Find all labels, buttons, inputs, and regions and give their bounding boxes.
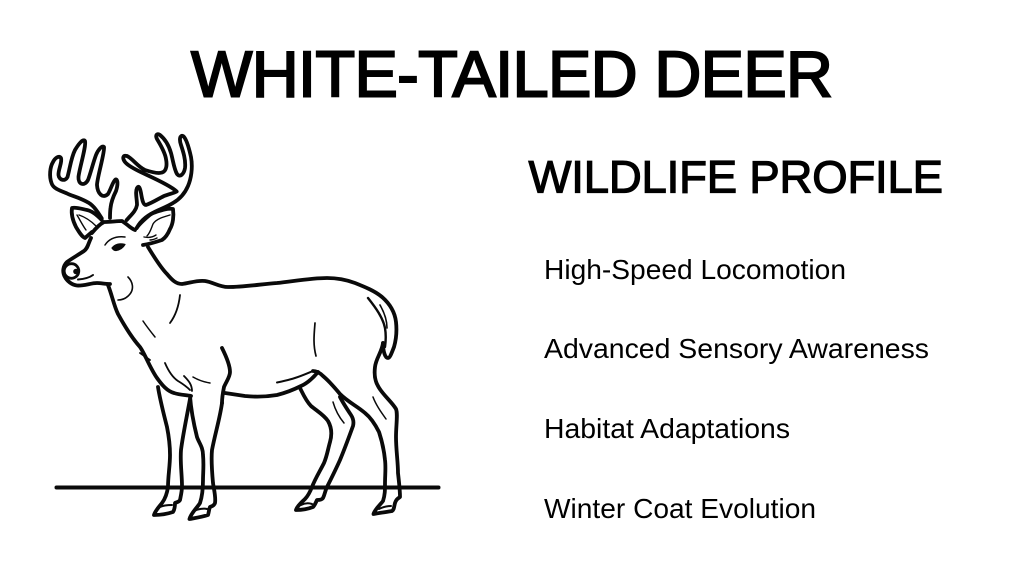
elbow mark bbox=[193, 377, 210, 383]
list item: winter coat: Winter Coat Evolution bbox=[544, 493, 816, 524]
belly bbox=[225, 372, 318, 397]
right antler bbox=[123, 134, 192, 228]
chest muscle line bbox=[165, 363, 190, 390]
neck and back line bbox=[148, 247, 396, 358]
jaw fold bbox=[118, 277, 132, 300]
hip mark bbox=[373, 397, 386, 419]
title: WHITE-TAILED DEER bbox=[191, 38, 833, 110]
hind leg one bbox=[296, 388, 353, 510]
right ear bbox=[137, 209, 173, 245]
rump and hind leg rear edge bbox=[313, 343, 400, 514]
hind hoof two bbox=[379, 506, 391, 509]
list item: habitat: Habitat Adaptations bbox=[544, 413, 790, 444]
right ear inner bbox=[144, 215, 170, 240]
front hoof one bbox=[160, 505, 172, 507]
front leg one bbox=[154, 387, 190, 515]
left ear bbox=[72, 208, 102, 238]
left ear inner bbox=[77, 215, 96, 230]
shoulder bbox=[222, 348, 230, 403]
flank mark bbox=[314, 323, 316, 356]
left antler bbox=[50, 140, 117, 218]
front leg two bbox=[190, 396, 222, 519]
chest mark bbox=[140, 353, 150, 360]
eye bbox=[112, 244, 125, 250]
face and muzzle bbox=[63, 238, 110, 286]
eyebrow bbox=[105, 237, 125, 245]
foreleg crease bbox=[184, 376, 192, 391]
thigh crease bbox=[277, 371, 313, 382]
hind hoof one bbox=[301, 503, 312, 505]
chest and neck front bbox=[108, 285, 191, 396]
neck lower mark bbox=[170, 295, 180, 323]
ground line bbox=[56, 486, 438, 490]
illustration: white-tailed deer line drawing bbox=[50, 134, 438, 519]
head outline bbox=[92, 221, 135, 233]
hind thigh mark bbox=[333, 402, 344, 423]
shoulder mark bbox=[143, 321, 155, 337]
subheading: WILDLIFE PROFILE bbox=[528, 152, 943, 202]
list item: sensory awareness: Advanced Sensory Awareness bbox=[544, 333, 929, 364]
front hoof two bbox=[194, 509, 207, 511]
mouth bbox=[78, 275, 93, 280]
list of profile topics bbox=[544, 254, 929, 524]
list item: locomotion: High-Speed Locomotion bbox=[544, 254, 846, 285]
tail inner lines bbox=[368, 298, 386, 347]
nose bbox=[64, 264, 79, 278]
